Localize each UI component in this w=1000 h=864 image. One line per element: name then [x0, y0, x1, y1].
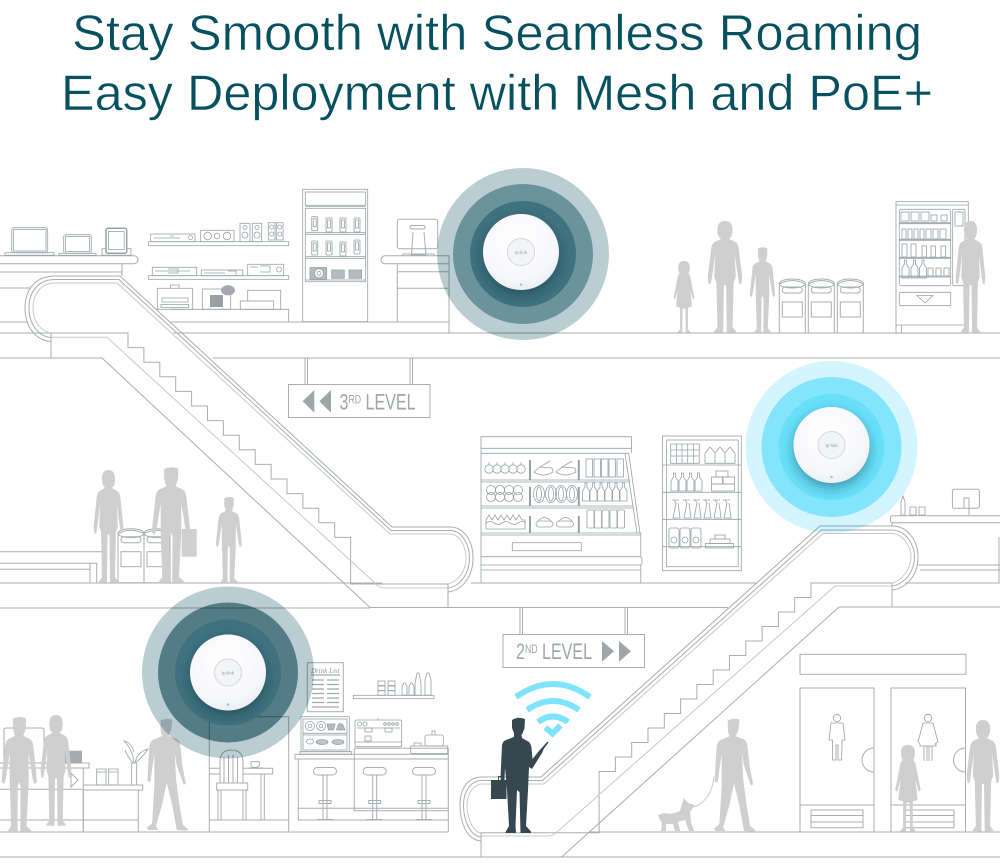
person: boy — [750, 247, 775, 333]
access point: second level: tp-link — [825, 443, 838, 448]
first level service counter — [0, 715, 188, 832]
person: woman at vending machine — [956, 221, 985, 333]
grocery shelf unit — [662, 436, 741, 571]
person: businessman with phone — [491, 718, 548, 833]
shopping bag — [182, 529, 197, 557]
cafe wall shelf with bottles — [353, 673, 434, 699]
side table with cups and plant — [83, 741, 148, 832]
title: Stay Smooth with Seamless Roaming — [72, 5, 922, 61]
bench — [0, 552, 102, 583]
person: man at counter — [2, 717, 37, 832]
access point: third level — [437, 168, 609, 340]
dog — [658, 798, 695, 831]
person: man — [152, 467, 190, 583]
laptop counter — [0, 256, 138, 288]
person: woman at counter — [41, 715, 71, 826]
bar counter — [295, 748, 448, 832]
pastry display — [300, 717, 352, 754]
escalator: first level to second level — [460, 526, 918, 857]
icon: counter bottle and boxes — [901, 496, 925, 515]
laptops and tablet — [5, 228, 131, 255]
vending machine — [896, 202, 968, 333]
screen — [63, 751, 82, 763]
drink list poster — [307, 663, 343, 712]
sign: 2nd level: LEVEL — [538, 641, 592, 665]
escalator: third level to second level — [25, 276, 473, 608]
counter monitor stand — [964, 498, 969, 515]
sign: 2nd level: ND — [525, 643, 538, 656]
sign: 2nd level: 2 — [516, 641, 525, 665]
third level electronics shop — [0, 189, 449, 333]
restrooms — [800, 654, 966, 832]
icon: women's room — [918, 714, 938, 761]
sign: 3rd level: LEVEL — [361, 391, 416, 415]
small triangle stand — [71, 773, 78, 787]
leash — [694, 776, 714, 807]
access point: first level: tp-link — [222, 670, 235, 676]
third level bins — [779, 279, 863, 333]
access point: third level: tp-link — [515, 250, 528, 255]
sign: 2nd level — [503, 607, 644, 668]
briefcase — [491, 780, 506, 799]
drink list poster: Drink List — [310, 667, 341, 675]
display cabinet — [303, 189, 368, 322]
person: man walking — [147, 719, 188, 831]
person: woman — [94, 470, 123, 583]
access point: first level — [142, 586, 314, 758]
sign: 3rd level: RD — [348, 393, 361, 407]
title — [61, 5, 933, 121]
computer counter — [0, 728, 89, 832]
electronics shelves — [148, 223, 289, 322]
grocery fridge — [481, 437, 642, 583]
second level right counter — [890, 489, 1000, 583]
cafe table and chair — [209, 717, 289, 832]
person: boy — [216, 497, 242, 583]
person: girl at restroom — [895, 745, 921, 832]
cafe bar with display and coffee machine — [295, 717, 448, 832]
chair — [217, 750, 248, 820]
bar teapot and canister — [411, 731, 448, 754]
bins — [118, 529, 170, 583]
person: man with dog walking — [658, 719, 755, 832]
third level waiting shoppers — [673, 221, 775, 333]
second level shoppers with bench and bins — [0, 467, 242, 583]
person: woman at restroom — [967, 720, 999, 832]
icon: men's room — [829, 714, 845, 760]
coffee machine — [355, 718, 402, 747]
sign: 3rd level: 3 — [340, 391, 348, 415]
building floors — [0, 322, 1000, 857]
sign: 3rd level — [288, 358, 430, 418]
title: Easy Deployment with Mesh and PoE+ — [61, 65, 933, 121]
person: girl — [673, 261, 695, 333]
coffee cup — [248, 762, 263, 768]
person: woman — [708, 221, 742, 333]
checkout counter with monitor — [381, 219, 449, 333]
bar stools — [314, 768, 436, 820]
wifi signal icon — [516, 684, 590, 734]
access point: second level — [746, 361, 918, 533]
check mark — [546, 726, 560, 734]
